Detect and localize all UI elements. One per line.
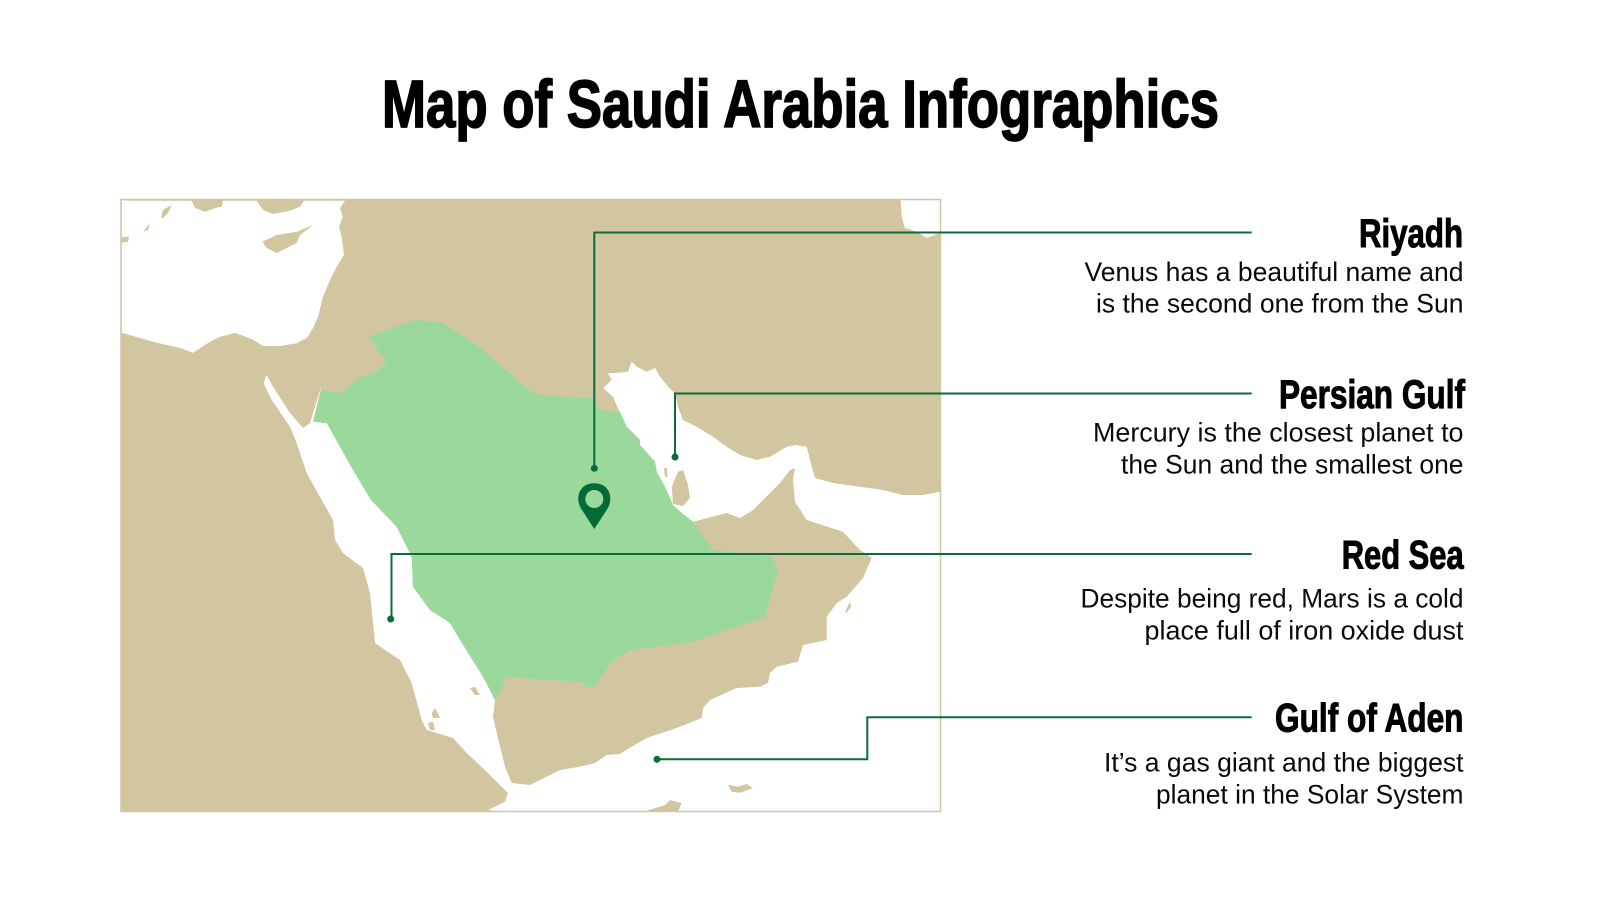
description: Gulf of Aden [1104,748,1464,809]
title: Map of Saudi Arabia Infographics [382,67,1219,142]
text block: Persian Gulf [1093,373,1466,479]
description: Red Sea: Despite being red, Mars is a cold [1080,584,1464,614]
heading: Persian Gulf: Persian Gulf [1279,373,1466,417]
sea: Caspian [901,200,940,238]
islands [122,205,851,812]
description: Red Sea [1080,584,1464,645]
connector: Persian Gulf [672,394,1252,460]
text block: Riyadh [1084,212,1464,319]
sea: Red Sea, Gulf of Aden, Arabian Sea and Persian Gulf [264,362,940,811]
description: Riyadh: Venus has a beautiful name and [1084,257,1464,287]
connector: Red Sea [387,554,1252,622]
text block: Gulf of Aden [1104,696,1464,809]
description: Gulf of Aden: It’s a gas giant and the biggest [1104,748,1464,778]
heading: Riyadh: Riyadh [1359,212,1463,256]
heading: Red Sea: Red Sea [1342,533,1464,577]
panel: map [121,199,940,812]
description: Persian Gulf [1093,418,1464,479]
description: Gulf of Aden: planet in the Solar System [1156,779,1464,809]
icon: map pin [578,483,610,529]
land background [121,199,940,812]
connector: Riyadh [591,232,1252,472]
connector: Gulf of Aden [654,717,1252,763]
description: Riyadh: is the second one from the Sun [1096,289,1464,319]
Qatar [672,470,690,506]
description: Persian Gulf: the Sun and the smallest one [1121,449,1464,479]
sea: Mediterranean [122,200,345,353]
description: Red Sea: place full of iron oxide dust [1144,615,1464,645]
text block: Red Sea [1080,533,1464,645]
description: Persian Gulf: Mercury is the closest planet to [1093,418,1464,448]
heading: Gulf of Aden: Gulf of Aden [1275,696,1464,740]
Saudi Arabia [313,320,778,700]
map frame [121,200,940,812]
description: Riyadh [1084,257,1464,319]
